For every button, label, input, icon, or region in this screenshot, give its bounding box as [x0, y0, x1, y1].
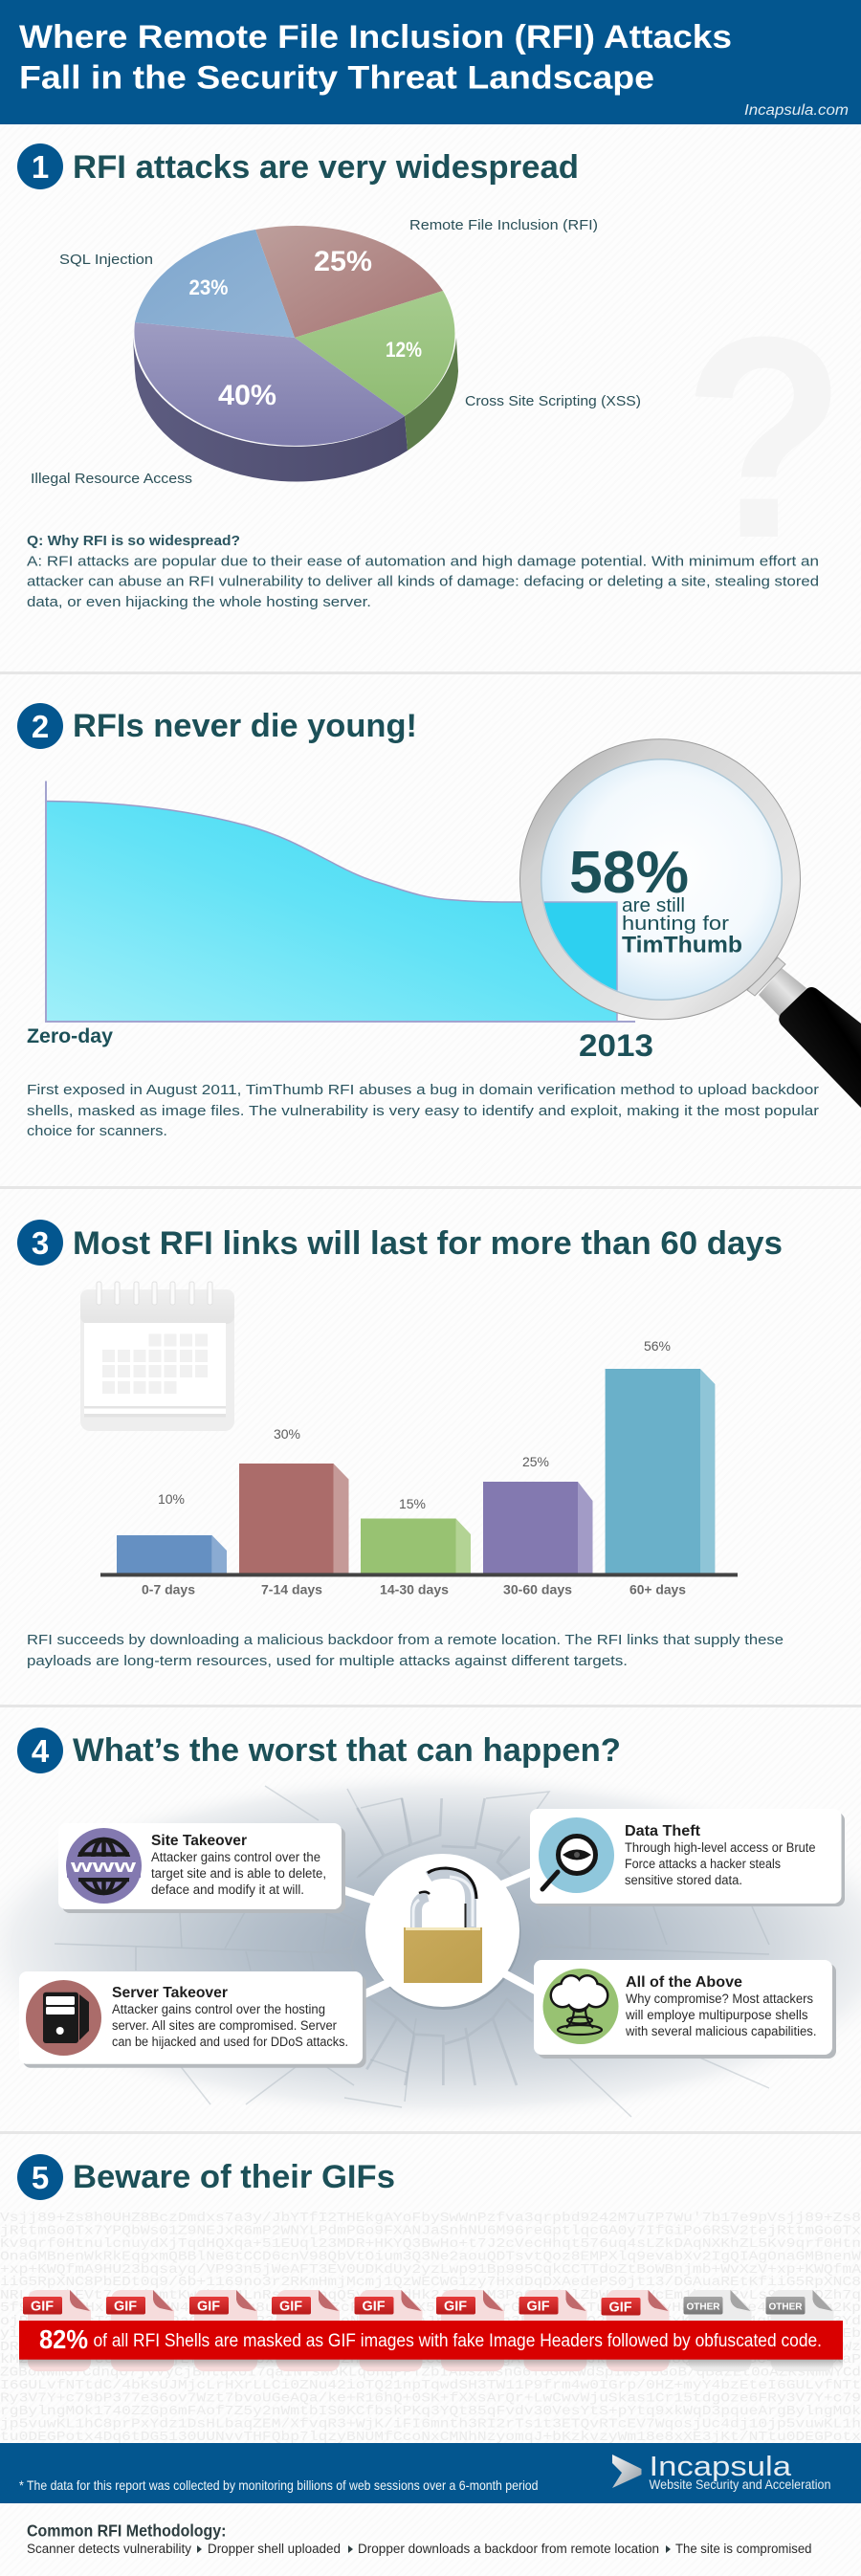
pie chart: 23% [189, 275, 228, 299]
file icon: GIF: GIF [279, 2298, 302, 2315]
file icon: OTHER: OTHER [687, 2301, 720, 2313]
bar: 14-30 days: 14-30 days [380, 1582, 449, 1597]
file icon: GIF [354, 2290, 423, 2371]
file icon: GIF [519, 2290, 587, 2371]
pie chart: Cross Site Scripting (XSS) [465, 394, 641, 409]
card: all of the above: with several malicious capabilities. [625, 2024, 817, 2038]
card: site takeover: www [69, 1857, 138, 1876]
file icon: GIF [23, 2290, 91, 2371]
obfuscated code background: rgBylngMOk1740ZZGp6mFAof7Z5y2nWmtbIS0KCfbskPKq3YQt85qFvdv30VesYtS+pYtq9xkWqD3pqueArgBylngMOk [0, 2405, 861, 2419]
methodology: Dropper downloads a backdoor from remote location [358, 2542, 659, 2556]
bar: 30-60 days [483, 1454, 593, 1597]
obfuscated code background: OnaGMBnenWkRkEqgxmQBBlNeGtCCD6cnV98QbVtOium3Q3Ne2aouQDTsvtQoz8EMPXlq9evabXv2IgQIAgOnaGMBnenW [0, 2250, 861, 2265]
area chart [27, 781, 653, 1063]
footer band [0, 2443, 861, 2503]
methodology [27, 2521, 811, 2556]
bar: 0-7 days: 10% [158, 1491, 185, 1507]
icon: calendar [80, 1282, 234, 1431]
methodology: Scanner detects vulnerability [27, 2542, 191, 2556]
methodology: Dropper shell uploaded [208, 2542, 341, 2556]
obfuscated code background: Ry3V7Y+c79bP377e36ov7Wzt7bvoUGeAQa/ke+R16hQ+0SK+fXXsArQr+LwCwvWjuSkas1Cr15tdgOze6FRy3V7Y+c79 [0, 2391, 861, 2407]
header banner: Fall in the Security Threat Landscape [19, 59, 654, 96]
card: server takeover [19, 1971, 366, 2068]
card: data theft [530, 1809, 845, 1906]
file icon: GIF: GIF [31, 2298, 54, 2315]
question and answer text [27, 534, 819, 610]
file icon: OTHER: OTHER [769, 2301, 803, 2313]
logo: Incapsula: Incapsula [649, 2452, 792, 2482]
bar: 7-14 days [239, 1426, 348, 1597]
central padlock [338, 1854, 536, 2010]
card: server takeover: can be hijacked and used for DDoS attacks. [112, 2035, 348, 2049]
header banner: Incapsula.com [744, 102, 849, 119]
bar: 14-30 days [361, 1496, 471, 1597]
pie chart [31, 218, 641, 487]
description text: First exposed in August 2011, TimThumb RFI abuses a bug in domain verification method to upload backdoor [27, 1083, 819, 1098]
file icon: GIF [436, 2290, 504, 2371]
question and answer text: Q: Why RFI is so widespread? [27, 534, 240, 549]
section 5: GIFs [0, 2154, 861, 2445]
heading 5: 5 [32, 2160, 49, 2195]
file icon: GIF: GIF [526, 2298, 549, 2315]
bar: 14-30 days: 15% [399, 1496, 426, 1511]
obfuscated code background: DRuX6kLp3YsGv9QaTn1BeJh7ZfMc4WoIr2NdKqE8tUxHg5PyAl0SbVm6CjRz3FiOw7Tk9QnDs2LuHe4XaYpGR+cI1Wz [0, 2341, 861, 2355]
obfuscated code background: tu0DEGPotx4Dq6tDG5130UUNvvTHFQbp7lqzyBNUMfCcoNxCMNhNzyomqJ+bKzkvzyWm18e8xXE3jKt/NTtu0DEGPotx [0, 2431, 861, 2445]
icon: magnifying glass with callout [520, 739, 861, 1108]
obfuscated code background: Kv9qrf0HtnulcnuydXjTqdHQXqa+51EUql23MDR+HKYQ3BwHo+t7J2cVecHhqt576uq4sLZkDAqNXKhZL5Kv9qrf0Htn [0, 2237, 861, 2252]
card: site takeover: Attacker gains control over the [151, 1850, 320, 1864]
red callout banner [19, 2321, 843, 2368]
icon: magnifying glass with callout: 58% [569, 840, 689, 906]
obfuscated code background: Vsjj89+Zs8h0UHZ8BczDmdxs7a3y/JbYTfI2THEkgAYoFbySwWnPzfva3qrpbd9242M7u7P7Wu'7b17e9pVsjj89+Zs8 [0, 2212, 861, 2226]
file icon: GIF: GIF [362, 2298, 385, 2315]
card: all of the above [534, 1960, 836, 2059]
card: all of the above: Why compromise? Most attackers [626, 1992, 813, 2006]
heading 5 [17, 2154, 395, 2200]
obfuscated code background: yiH7nQc2WfTzKb8PxLr5Md3UaGs9EoV1tJk4YhNq6RgBwCe0ImXu7SvDp2ZlFyOa5TjK8nGi3HtRq1WmPsLxZjV6uEb [0, 2327, 861, 2342]
pie chart: SQL Injection [59, 253, 153, 268]
bar: 60+ days: 56% [644, 1338, 671, 1354]
bar: 7-14 days: 30% [274, 1426, 300, 1442]
heading 4: 4 [32, 1733, 50, 1769]
methodology: The site is compromised [675, 2542, 811, 2556]
heading 5: Beware of their GIFs [73, 2159, 395, 2195]
file icon: GIF: GIF [444, 2298, 467, 2315]
pie chart: Remote File Inclusion (RFI) [409, 218, 598, 233]
file icon: GIF [189, 2290, 257, 2371]
card: server takeover: server. All sites are compromised. Server [112, 2018, 337, 2033]
question and answer text: data, or even hijacking the whole hosting server. [27, 595, 371, 610]
bar chart [100, 1338, 738, 1597]
section 2: RFIs never die young [17, 703, 861, 1139]
bar: 7-14 days: 7-14 days [261, 1582, 322, 1597]
question and answer text: A: RFI attacks are popular due to their ease of automation and high damage potential. With minimum effort an [27, 555, 819, 570]
obfuscated code background: ZGBoNWmGTCdnqO7jvVyCjBHtqxUI7qaINTsWoKLqonqPPTZbIAbszWsnG6TOGOKWdSpIwsTUGoB/qBazEt0oAZKsNmWYCd [0, 2367, 861, 2380]
file icon: OTHER [765, 2290, 834, 2371]
card: server takeover: Server Takeover [112, 1985, 228, 2001]
heading 4: What’s the worst that can happen? [73, 1732, 621, 1769]
heading 3: Most RFI links will last for more than 60 days [73, 1225, 783, 1262]
pie chart: Illegal Resource Access [31, 472, 192, 487]
logo: Incapsula [612, 2452, 830, 2492]
header banner: Where Remote File Inclusion (RFI) Attacks [19, 19, 732, 55]
bar: 60+ days: 60+ days [629, 1582, 686, 1597]
obfuscated code background: jp5vuwKL1hC8prPxYdz1DsHLbaqZEM/XfvqR3+WjK/iFI6mnth3RI2rTs1t3ETQvRTcEV7WqosjUc4dj10jp5vuwKL1h [0, 2418, 861, 2432]
section 3: link lifetime [17, 1220, 784, 1669]
obfuscated code background [0, 2212, 861, 2445]
description text: RFI succeeds by downloading a malicious backdoor from a remote location. The RFI links that supply these [27, 1633, 784, 1648]
pie chart: 12% [386, 338, 422, 362]
bar: 0-7 days: 0-7 days [142, 1582, 195, 1597]
logo: Incapsula: Website Security and Acceleration [649, 2477, 830, 2492]
heading 1: RFI attacks are very widespread [73, 149, 579, 186]
card: server takeover: Attacker gains control over the hosting [112, 2002, 325, 2016]
bar: 30-60 days: 30-60 days [503, 1582, 572, 1597]
area chart: Zero-day [27, 1025, 113, 1047]
card: site takeover: deface and modify it at will. [151, 1882, 304, 1897]
methodology: Common RFI Methodology: [27, 2521, 226, 2541]
description text: payloads are long-term resources, used for multiple attacks against different targets. [27, 1654, 628, 1669]
file icons row [23, 2290, 834, 2371]
card: data theft: Data Theft [625, 1823, 700, 1839]
card: data theft: Force attacks a hacker steals [625, 1857, 781, 1871]
red callout banner: 82% [39, 2324, 88, 2354]
bar: 60+ days [606, 1338, 715, 1597]
card: all of the above: will employe multipurpose shells [625, 2008, 808, 2022]
area chart: 2013 [579, 1028, 653, 1063]
header banner [0, 0, 861, 124]
file icon: OTHER [683, 2290, 752, 2371]
file icon: GIF: GIF [197, 2298, 220, 2315]
heading 2: 2 [32, 709, 49, 744]
bar: 0-7 days [117, 1491, 227, 1597]
card: data theft: sensitive stored data. [625, 1873, 742, 1887]
obfuscated code background: jRttmGo0Tx7YPQbWs01Z9NEJxR6mP2WNYLPdmPGo9FXANJaSnhNU6M96reGptlqcGA0y7IfGiPo6RSV2tejRttmGo0Tx [0, 2225, 861, 2238]
obfuscated code background: iiG5RpXNC8PbEDt0q9/6b+1169no3r2RKmHmjMcmj1QzWECWG1zy7HxdDqDXAedePS0jt13/DGAuaREtKfiiG5RpXNC8 [0, 2276, 861, 2290]
card: site takeover: Site Takeover [151, 1833, 247, 1849]
heading 1 [17, 143, 579, 189]
card: data theft: Through high-level access or Brute [625, 1840, 815, 1855]
obfuscated code background: ojP4sV7mKcT2xHnBfL9aQeU5yWgR3dZtI8qXoN1uGvM6hJrSe0CkYb3PwFa7DlO2TiVn5mExKs9zQuH4gRcAJ8Lw3Yd [0, 2315, 861, 2329]
icon: magnifying glass with callout: hunting for [622, 914, 729, 935]
icon: magnifying glass with callout: are still [622, 895, 685, 916]
file icon: GIF: GIF [608, 2300, 631, 2315]
heading 1: 1 [32, 149, 49, 185]
section 4: worst case [0, 1728, 861, 2124]
footer band: * The data for this report was collected by monitoring billions of web sessions over a 6-month period [19, 2477, 538, 2493]
card: site takeover: target site and is able to delete, [151, 1866, 326, 1881]
card: site takeover [58, 1823, 345, 1913]
pie chart: 40% [218, 380, 276, 411]
description text: choice for scanners. [27, 1124, 167, 1139]
file icon: GIF [601, 2290, 670, 2371]
heading 2 [17, 703, 417, 749]
icon: magnifying glass with callout: TimThumb [622, 933, 742, 958]
file icon: GIF [106, 2290, 174, 2371]
heading 3: 3 [32, 1225, 49, 1261]
obfuscated code background: 5f9Wk3TyeHxP2m0B7dN4qRvL7Ig8uSa6JhlZcF1oYbKtX5nQqMwE9rGpVi3D7xTuC2sBfAyH8kN6LjOe4WzsT7Gm2Kp [0, 2301, 861, 2316]
heading 2: RFIs never die young! [73, 708, 417, 744]
section 1: widespread attacks [17, 143, 846, 610]
obfuscated code background: I6GULvfNTtdC/4bKsUJMjcLrHXrLLCi0ZNu42ioTQ21npTqwdSH3TW11P9frm4w0IGrp/0HZ+myY4bzEteI6GULvfNTt [0, 2379, 861, 2393]
obfuscated code background: kMz3QbV9hTc6NwEy1RjLf8GsPa4UxKd7IoYn2HmBt5XqZe0WrCu3SgAl9DvFi6JkOp1MyTn8QhEs7RbGc4Wz9tLuXaP [0, 2353, 861, 2367]
bar: 30-60 days: 25% [522, 1454, 549, 1469]
card: all of the above: All of the Above [626, 1974, 742, 1991]
pie chart: 25% [314, 246, 372, 277]
obfuscated code background: NRLq8wZhEVt7cYpjemtKw2bF44LnRs3xMznqQ5vTe8udHk2JfyNzM3PaG7xdulZbW6tRoVcEm1hGYDRvLs9KuOGDZh7q [0, 2289, 861, 2303]
description text: shells, masked as image files. The vulnerability is very easy to identify and exploit, making it the most popular [27, 1104, 819, 1119]
icon: question mark watermark: ? [683, 278, 846, 598]
description text [27, 1633, 784, 1669]
description text [27, 1083, 819, 1139]
obfuscated code background: +xp+KWQfmA9HU23bqsayq/VP93n5jWeAFT3EV0UDKdUy2yzLwp91Bp995CqkCCTTdoZtBoWBnjmb+WvXzV+xp+KWQfmA [0, 2263, 861, 2278]
question and answer text: attacker can abuse an RFI vulnerability to deliver all kinds of damage: defacing or deleting a site, stealing stored [27, 574, 819, 589]
file icon: GIF [272, 2290, 340, 2371]
file icon: GIF: GIF [114, 2298, 137, 2315]
